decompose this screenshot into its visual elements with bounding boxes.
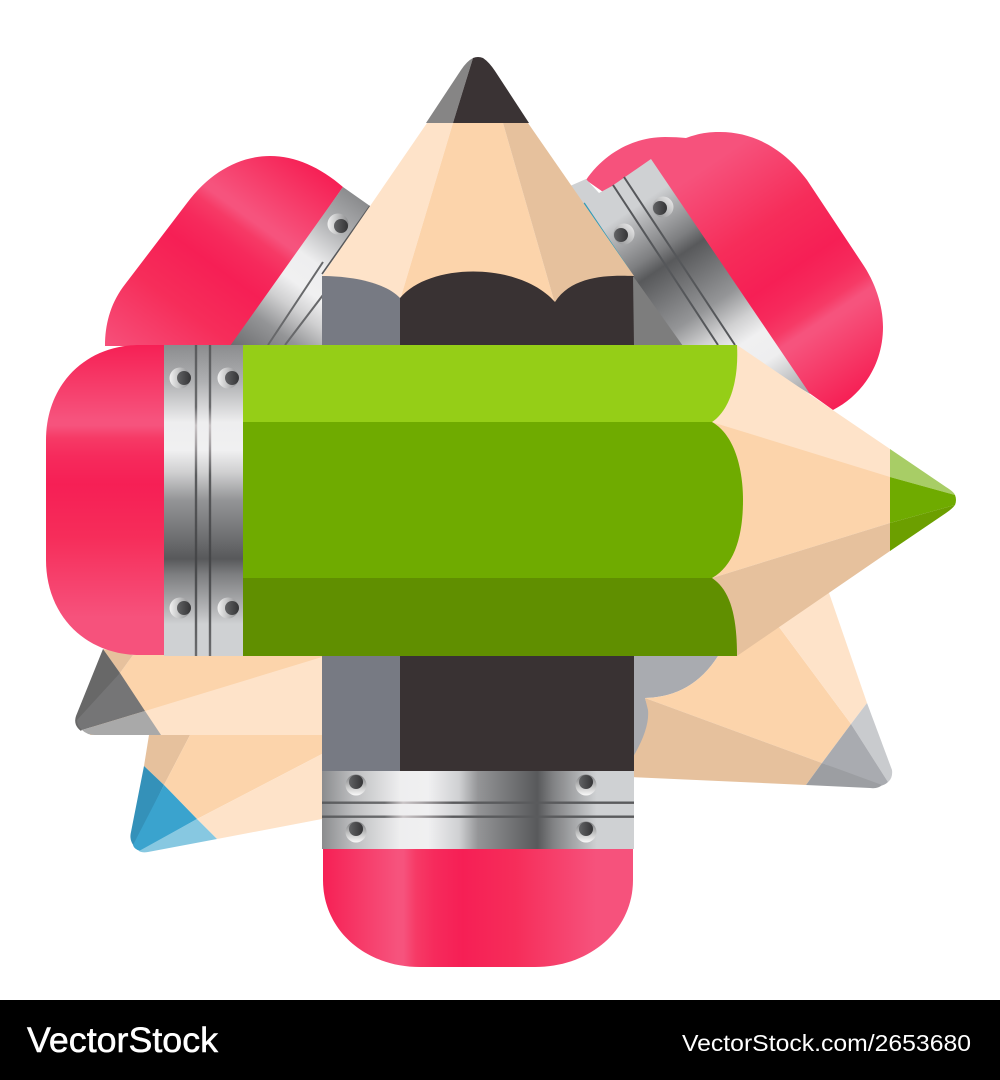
vertical pencil dark facets [400,271,634,771]
main pencil green lower facet [243,578,737,656]
pencil: back blue pointing left [130,735,322,852]
vertical pencil gray facet [322,276,400,771]
main pencil wood [690,345,890,656]
main pencil green tip [890,449,956,551]
main pencil green middle facet [243,422,743,578]
main pencil eraser [46,345,164,655]
footer url text: VectorStock.com/2653680 [682,1030,971,1056]
vertical pencil metal band [322,771,634,849]
pencil: back gray pointing lower right [630,590,892,788]
vertical pencil gray shade at right [633,276,683,346]
footer logo text: VectorStock [27,1021,219,1060]
pencil: back upper left eraser and band [105,156,370,346]
vertical pencil lead tip [426,57,529,123]
vertical pencil wood cone [322,123,634,304]
pencil: back gray pointing left [75,649,322,735]
pencil: back upper right eraser and band [570,132,883,410]
pencil: main horizontal green [46,345,956,656]
main pencil metal band [164,345,243,656]
pencil: vertical pointing up [322,57,683,967]
footer bar [0,1000,1000,1080]
main pencil green upper facet [243,345,737,422]
vertical pencil eraser [323,849,633,967]
